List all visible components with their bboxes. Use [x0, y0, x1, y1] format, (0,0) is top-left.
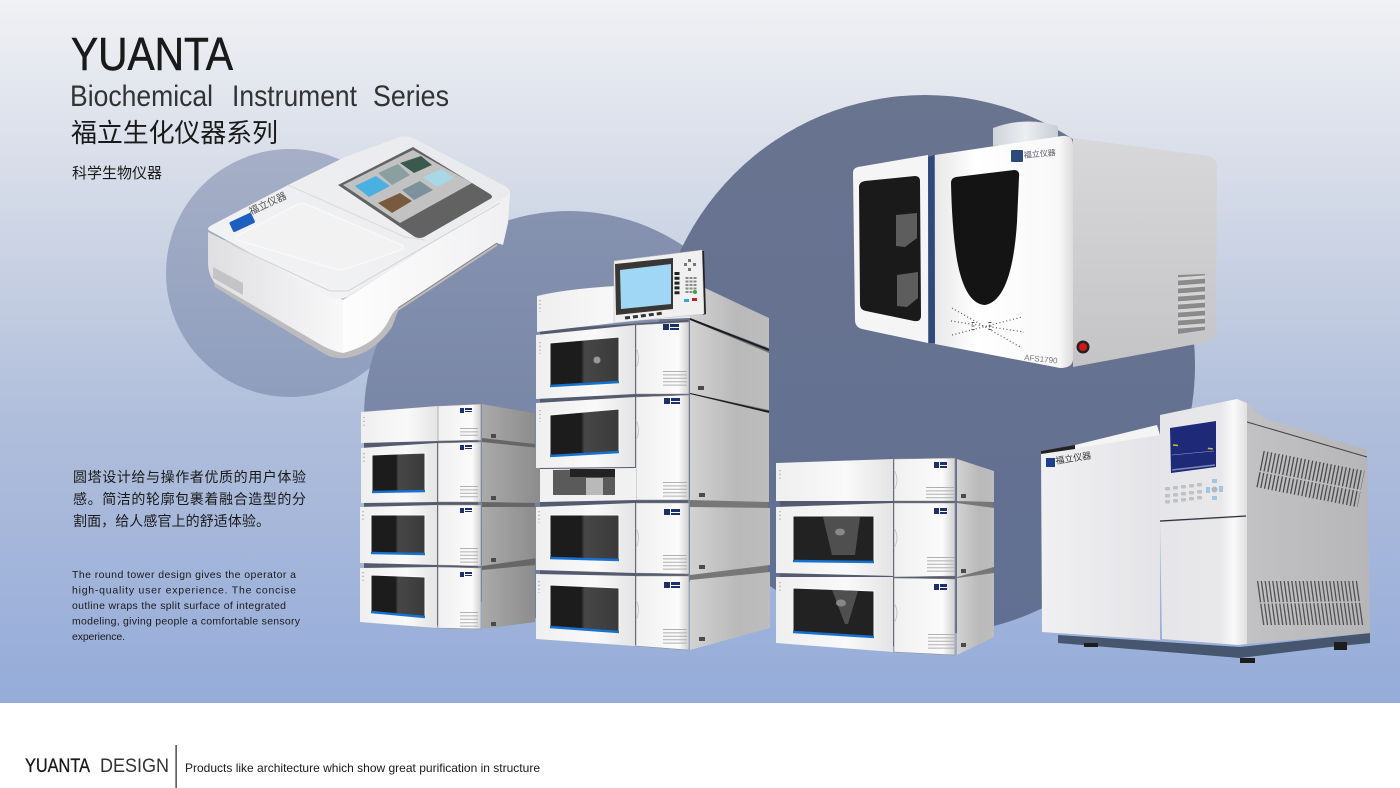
GC screen: [1170, 421, 1216, 473]
heading: Chinese series name: 福立生化仪器系列: [71, 118, 278, 148]
front left face: [208, 232, 343, 353]
text block: English description: high-quality user experience. The concise: [72, 584, 296, 596]
stack backing: [540, 320, 688, 650]
screen tile images: [355, 156, 454, 213]
text block: English description: modeling, giving people a comfortable sensory: [72, 616, 301, 628]
lower grill tie band: [1260, 602, 1362, 603]
module: bottom window unit: [776, 573, 994, 655]
top face: [208, 136, 510, 299]
controller display unit: [614, 250, 706, 323]
blue divider: [928, 155, 935, 343]
module: bottom window unit: [536, 572, 770, 650]
power button: [1076, 340, 1090, 354]
module: top lid: [537, 284, 769, 350]
product: benchtop spectrophotometer: [208, 136, 510, 358]
footer tagline: Products like architecture which show great purification in structure: [185, 761, 540, 775]
module: second window unit with open bay: [536, 394, 769, 502]
sample holders: [896, 213, 918, 307]
heading: English series name: Biochemical: [70, 80, 213, 113]
front right face: [343, 193, 510, 353]
centre upper panel: [1160, 399, 1247, 521]
title: YUANTA: YUANTA: [71, 28, 233, 80]
brand name: 福立仪器: [247, 189, 289, 218]
sample lid: [236, 203, 403, 270]
module: middle window unit: [776, 503, 994, 577]
module: upper window unit: [536, 320, 769, 412]
AFS brand badge: [1011, 150, 1023, 162]
side seam: [1247, 422, 1367, 457]
product: right instrument stack: [776, 458, 994, 655]
left window: [859, 176, 921, 321]
text block: Chinese description: 割面，给人感官上的舒适体验。: [73, 513, 270, 529]
background circle: left: [166, 149, 414, 397]
footer divider: [176, 745, 177, 788]
text block: Chinese description: [73, 469, 306, 529]
product: centre instrument tower: [536, 250, 770, 650]
background circle: middle: [364, 211, 774, 621]
instrument grey base strip: [208, 240, 497, 358]
screen display area: [343, 150, 472, 223]
touch screen: [338, 147, 492, 238]
footer brand: YUANTA DESIGN: YUANTA: [25, 756, 90, 777]
side backing: [690, 320, 768, 648]
footer brand: YUANTA DESIGN: [25, 756, 169, 777]
background circle: right: [655, 95, 1195, 635]
left oven body: [1041, 435, 1160, 640]
upper grill: [1260, 469, 1361, 489]
dark edge: [1041, 445, 1075, 454]
model label: AFS1790: [1024, 353, 1058, 366]
brand badge: [229, 212, 255, 233]
side slot shadow: [398, 243, 497, 308]
panel seam: [1160, 516, 1246, 521]
heading: English series name: [70, 80, 449, 113]
right side panel: [1073, 138, 1217, 367]
text block: Chinese description: 感。简洁的轮廓包裹着融合造型的分: [73, 491, 306, 507]
module: third window unit: [536, 503, 770, 575]
top bevel: [1041, 425, 1160, 454]
side vents: [1178, 274, 1205, 334]
product: left instrument stack: [360, 404, 540, 629]
lower grill: [1260, 581, 1362, 625]
GC brand name: 福立仪器: [1055, 449, 1092, 466]
upper deck step: [288, 185, 425, 240]
heading: English series name: Series: [373, 80, 449, 113]
product: AFS1790 fluorescence spectrometer: [853, 121, 1217, 368]
left door: [853, 155, 928, 343]
side backing: [957, 459, 993, 653]
side vent: [213, 267, 243, 295]
text block: English description: experience.: [72, 631, 125, 643]
right side panel: [1247, 403, 1370, 644]
text block: English description: [72, 569, 301, 643]
AFS brand name: 福立仪器: [1023, 147, 1056, 160]
direction pad: [1206, 479, 1223, 500]
GC brand badge: [1046, 458, 1055, 467]
text block: Chinese description: 圆塔设计给与操作者优质的用户体验: [73, 469, 306, 485]
module: lid unit: [776, 458, 994, 502]
D-shaped window: [951, 170, 1019, 305]
stack backing: [780, 460, 955, 650]
product: gas chromatograph: [1041, 399, 1370, 663]
chimney cylinder: [993, 121, 1058, 146]
text block: English description: outline wraps the split surface of integrated: [72, 600, 286, 612]
keypad: [1165, 483, 1202, 504]
text block: English description: The round tower design gives the operator a: [72, 569, 296, 581]
upper grill tie band: [1258, 471, 1362, 491]
base and feet: [1058, 633, 1370, 663]
centre lower panel: [1160, 517, 1247, 645]
heading: English series name: Instrument: [232, 80, 358, 113]
footer brand: YUANTA DESIGN: DESIGN: [100, 756, 169, 777]
front edge contour: [232, 203, 500, 291]
dotted burst: [951, 308, 1024, 348]
main front: [935, 136, 1073, 368]
subheading: Chinese: 科学生物仪器: [72, 165, 162, 182]
footer band: [0, 703, 1400, 788]
